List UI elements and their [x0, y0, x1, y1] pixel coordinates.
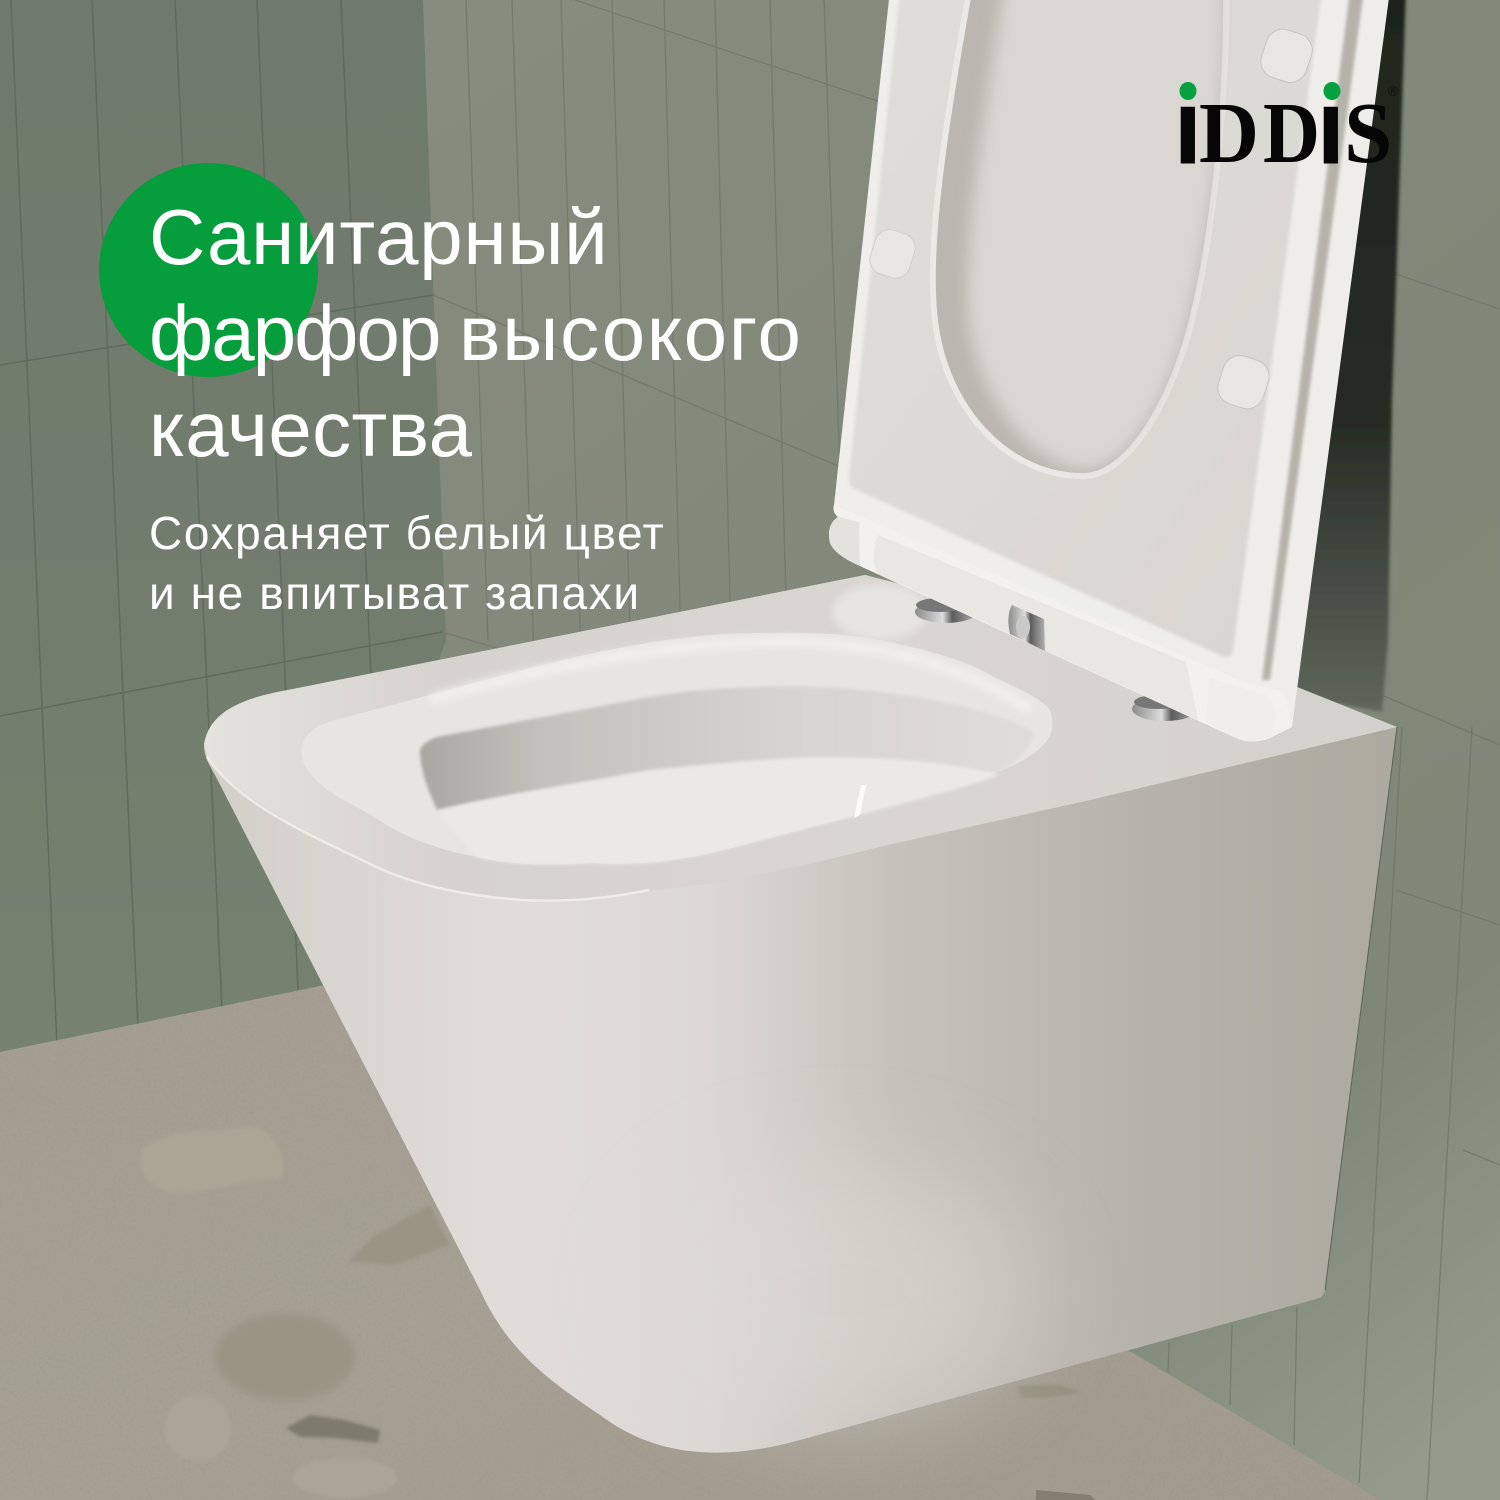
bowl lower interior: [437, 758, 1000, 865]
seat opening ridge: [933, 0, 1226, 476]
logo wordmark: I: [1320, 91, 1342, 179]
heading: Санитарный: [149, 193, 609, 281]
hinge chrome release button: [1008, 605, 1045, 651]
bowl body: [204, 575, 1397, 1453]
chrome hinge post right: [1132, 695, 1198, 721]
lid lower frame: [829, 505, 1292, 742]
lid outer shell: [829, 0, 1390, 742]
heading: качества: [149, 385, 472, 473]
bumper left: [866, 226, 919, 282]
rear rim reflection: [832, 584, 928, 640]
toilet bowl: [204, 575, 1397, 1453]
hinge bar: [874, 535, 1198, 720]
subheading text: [149, 507, 665, 619]
bumper lower right: [1213, 351, 1274, 413]
bowl rim upper glow: [430, 642, 1030, 710]
hinge end left: [829, 517, 860, 566]
lid side groove: [1262, 0, 1364, 680]
rim top surface: [204, 575, 1397, 901]
body lower reflection: [650, 1160, 1030, 1420]
toilet seat and lid: [829, 0, 1390, 742]
bowl opening rim: [302, 633, 1052, 865]
bowl shelf shadow: [420, 686, 1034, 810]
hinge end right: [1206, 678, 1276, 742]
body right edge line: [1325, 727, 1397, 1290]
chrome hinge post left: [915, 598, 977, 623]
rim front edge: [207, 757, 649, 901]
logo dot left: [1180, 82, 1196, 100]
logo wordmark: S: [1344, 84, 1392, 181]
bumper upper right: [1256, 25, 1317, 87]
floor: stone surface: [0, 980, 1400, 1500]
logo wordmark: I: [1177, 91, 1199, 179]
subheading text: и не впитыват запахи: [149, 567, 641, 619]
logo wordmark: D: [1199, 84, 1259, 181]
green circle accent: [99, 163, 318, 377]
logo wordmark: D: [1263, 84, 1320, 181]
bowl water glint: [854, 785, 866, 818]
subheading text: Сохраняет белый цвет: [149, 507, 665, 559]
logo: IDDIS: [1177, 82, 1399, 181]
shadow of the lid on the wall: [1295, 0, 1406, 712]
wall: left darker niche section: [0, 0, 446, 1052]
logo registered mark: ®: [1388, 83, 1399, 99]
logo dot right: [1324, 82, 1340, 100]
lid recessed panel: [849, 0, 1322, 657]
seat inner floor: [968, 0, 1226, 470]
heading: фарфор высокого: [149, 289, 803, 377]
heading: [149, 193, 803, 473]
